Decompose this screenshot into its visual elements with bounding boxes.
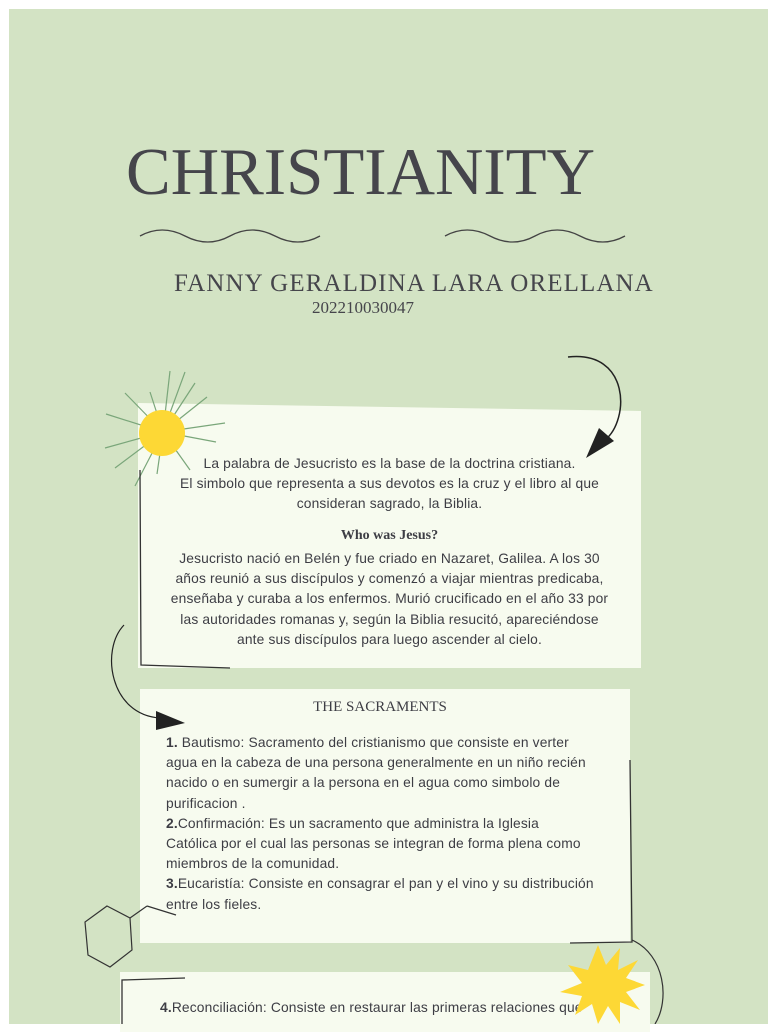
text: sacraments list: nacido o en sumergir a la persona en el agua como simbolo de [166,775,560,790]
text: sacraments list: miembros de la comunidad. [166,856,339,871]
student number: 202210030047 [312,298,414,317]
arrow: to intro panel [568,357,621,458]
text: sacraments list: 1. Bautismo: Sacramento del cristianismo que consiste en verter [166,735,569,750]
text: intro: El simbolo que representa a sus devotos es la cruz y el libro al que [180,476,599,491]
text: sacraments list: 2.Confirmación: Es un sacramento que administra la Iglesia [166,816,539,831]
icon: hexagon [85,906,176,967]
title: CHRISTIANITY [126,135,595,209]
text: sacraments list: agua en la cabeza de una persona generalmente en un niño recién [166,755,586,770]
text: jesus [171,553,608,647]
text: sacraments list: purificacion . [166,796,246,811]
text: intro [181,458,598,511]
text: jesus: las autoridades romanas y, según la Biblia resucitó, apareciéndose [180,612,599,627]
panel: sacraments continued [120,972,650,1032]
text: sacraments list: entre los fieles. [166,897,261,912]
text: sacraments list: 3.Eucaristía: Consiste en consagrar el pan y el vino y su distribución [166,876,594,891]
icon: starburst [560,945,645,1024]
icon: sun [105,371,225,486]
text: jesus: ante sus discípulos para luego ascender al cielo. [237,632,542,647]
text: jesus: Jesucristo nació en Belén y fue criado en Nazaret, Galilea. A los 30 [179,551,600,566]
text: intro: La palabra de Jesucristo es la base de la doctrina cristiana. [204,456,575,471]
author name: FANNY GERALDINA LARA ORELLANA [174,270,654,297]
text: jesus: enseñaba y curaba a los enfermos. Murió crucificado en el año 33 por [171,591,608,606]
text: intro: consideran sagrado, la Biblia. [297,496,482,511]
panel: intro [138,403,641,668]
text: sacraments list: Católica por el cual las personas se integran de forma plena como [166,836,581,851]
text: reconciliation: 4.Reconciliación: Consiste en restaurar las primeras relaciones que [160,1000,583,1015]
arrow: to sacraments panel [112,625,185,730]
text: jesus: años reunió a sus discípulos y comenzó a viajar mientras predicaba, [175,571,604,586]
panel: sacraments [140,689,630,943]
heading: sacraments: THE SACRAMENTS [313,699,447,715]
text: sacraments list [166,735,594,912]
heading: who was jesus: Who was Jesus? [341,528,438,543]
